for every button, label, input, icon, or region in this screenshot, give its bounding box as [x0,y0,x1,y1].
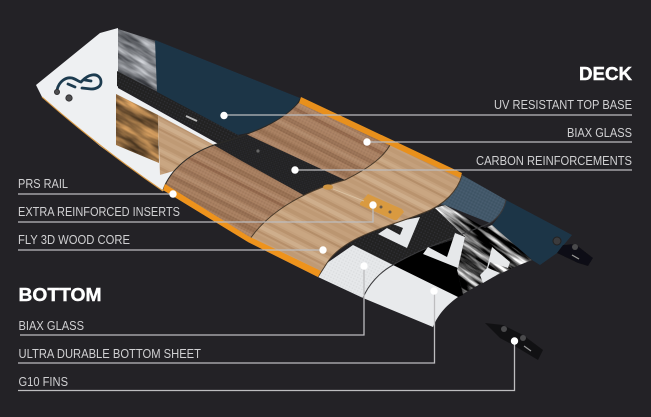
label: biax glass bottom [18,262,368,335]
wood marble swatch [116,94,159,163]
label: uv resistant top base: UV RESISTANT TOP BASE [494,98,632,112]
top base blue [155,40,300,135]
label: uv resistant top base [220,98,632,119]
label: extra reinforced inserts [18,201,377,222]
lower orange rail [163,184,321,277]
carbon screw [256,149,260,153]
label: biax glass deck [363,126,632,146]
insert link line [333,189,364,201]
label: fly 3d wood core [18,233,327,254]
reinforced insert [360,194,404,220]
light wood core [248,141,462,277]
tail marble [435,205,532,294]
white biax bottom [318,245,393,298]
nose white section [36,28,222,191]
label: biax glass deck: BIAX GLASS [567,126,632,140]
label: prs rail [18,177,177,198]
label: extra reinforced inserts: EXTRA REINFORCED INSERTS [18,205,180,219]
nose logo [57,75,101,90]
label: biax glass bottom: BIAX GLASS [18,319,84,333]
board illustration [36,28,593,327]
carbon mark [186,116,197,121]
nose orange rail edge [42,97,163,191]
rear gray blue biax [435,175,506,223]
label: ultra durable bottom sheet [18,287,438,363]
ultra durable bottom sheet [363,265,458,327]
black band [393,236,465,297]
insert screws [380,206,392,214]
heading: bottom: BOTTOM [18,285,102,305]
wood core outline [248,141,462,277]
label: g10 fins: G10 FINS [18,375,68,389]
nose screws [54,89,72,101]
heading: deck: DECK [579,64,632,84]
biax curve outline [163,98,302,190]
label: carbon reinforcements: CARBON REINFORCEMENTS [476,154,632,168]
label: carbon reinforcements [291,154,632,174]
loose g10 fin [485,323,543,360]
deck tail screw [553,237,561,245]
biax glass over wood [163,102,390,242]
rear gray blue weave [435,175,506,223]
front carbon strip [117,71,240,144]
white logo shape three [480,247,510,283]
rear fin on deck [557,244,593,266]
top orange rail [299,97,462,178]
rear blue top base [492,200,572,265]
label: fly 3d wood core: FLY 3D WOOD CORE [18,233,130,247]
label: ultra durable bottom sheet: ULTRA DURABLE BOTTOM SHEET [18,347,201,361]
white logo shape one [378,217,420,248]
small insert [323,184,333,190]
white logo shape two [423,233,465,268]
wood strip [158,115,214,175]
nose marble swatch [118,29,157,92]
rear carbon [337,203,467,265]
label: g10 fins [18,337,518,390]
curve outline rear [363,200,506,298]
label: prs rail: PRS RAIL [18,177,68,191]
